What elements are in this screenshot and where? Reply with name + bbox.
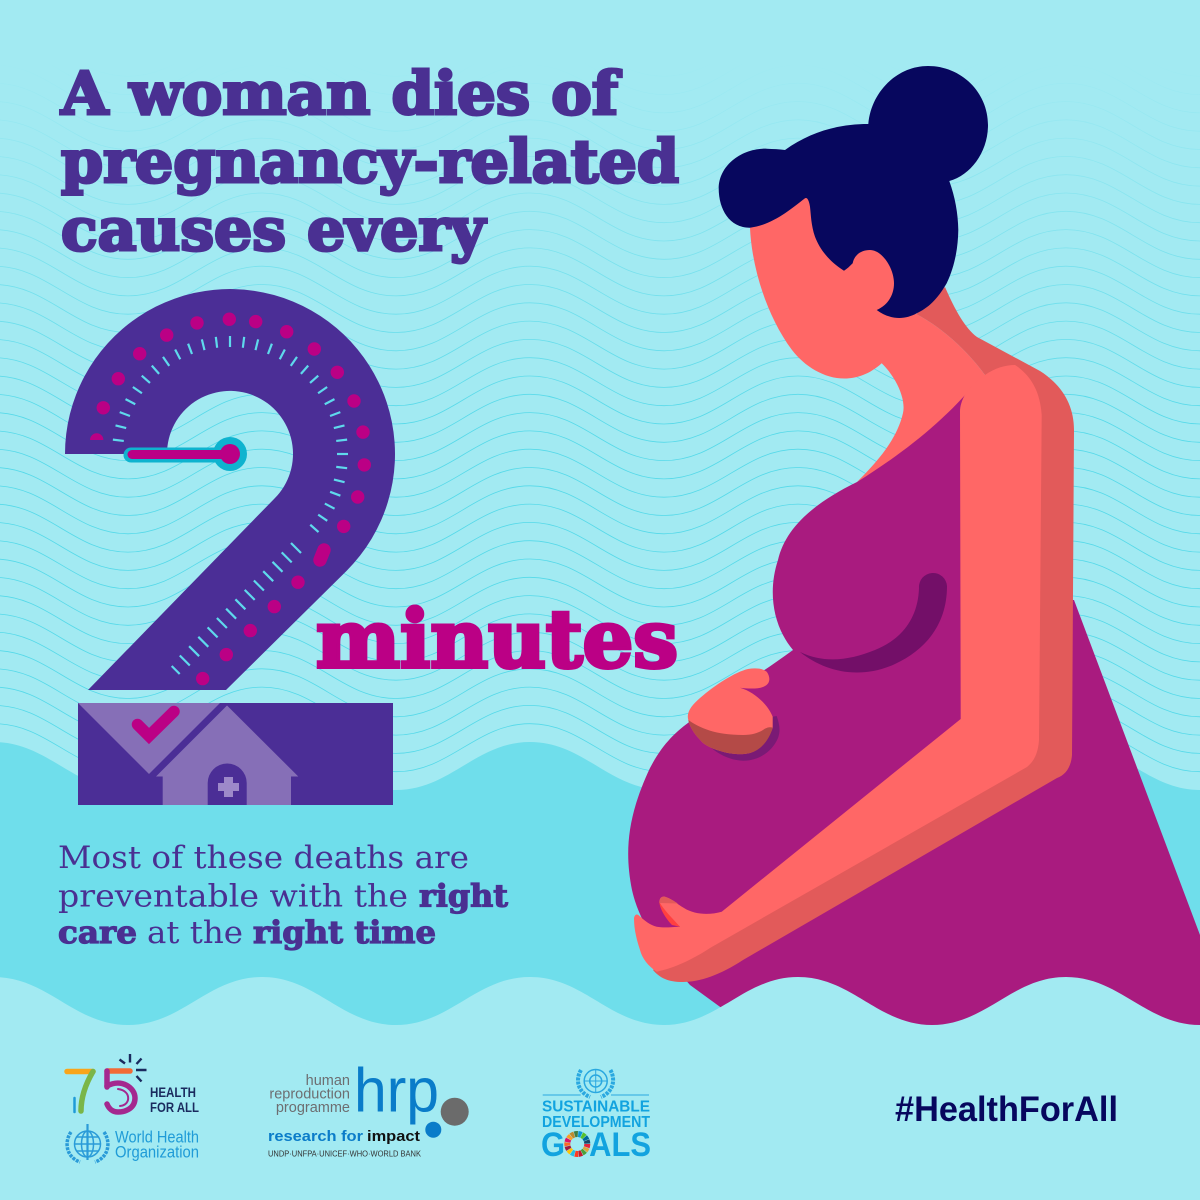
arm lit [634,365,1042,972]
subtext: preventable with the [58,878,408,914]
WHO emblem [67,1124,108,1162]
SDG text: SUSTAINABLE [542,1098,650,1116]
word: minutes: minutes [316,592,678,686]
upper hand [688,668,773,754]
thumb crease [659,902,680,927]
dress [628,382,1200,1060]
magenta minute dots [90,312,371,685]
SDG text: DEVELOPMENT [542,1114,650,1131]
programme name: programme [276,1100,350,1116]
subtext: Most of these deaths are [58,840,469,876]
gauge needle [131,437,247,471]
background wave lines [0,0,1200,772]
subtext: care [58,915,137,951]
SDG text: GOALS [541,1126,651,1164]
health for all text: FOR ALL [150,1100,199,1115]
icon: medical cross [218,777,239,797]
grey dot [441,1098,469,1126]
partner list: UNDP·UNFPA·UNICEF·WHO·WORLD BANK [268,1150,422,1158]
bottom wave band [0,977,1200,1200]
World Health Organization text: World Health [115,1128,199,1146]
hashtag: #HealthForAll [895,1090,1118,1129]
UN emblem [578,1070,613,1097]
sun rays [120,1054,146,1082]
clinic door [208,764,247,805]
logo: Sustainable Development Goals [541,1070,651,1164]
subtext: right [419,878,509,914]
health for all text: HEALTH [150,1085,196,1100]
title: A woman dies of [60,59,622,128]
subtext [58,840,509,951]
programme name [269,1073,350,1116]
icon: clinic house [156,706,298,805]
blue dot [425,1122,441,1138]
mid wave band [0,742,1200,1200]
breast shadow [800,573,947,673]
subtext: at the [147,915,243,951]
digit shape [65,289,395,690]
logo: HRP [268,1056,469,1158]
SDG text [541,1098,651,1164]
pregnant woman illustration [628,66,1200,1060]
hair [719,66,988,318]
numeral 75 [67,1071,135,1112]
upper hand shadow on dress [694,716,780,761]
research for impact [268,1128,420,1145]
programme name: human [306,1073,350,1089]
base panel [78,703,393,805]
envelope flap [78,703,220,774]
SDG colour wheel [563,1130,591,1158]
research for impact: impact [367,1128,420,1145]
programme name: reproduction [269,1086,350,1102]
title: pregnancy-related [61,127,679,196]
logo: WHO 75 Health for All [67,1054,199,1162]
subtext: right time [253,915,436,951]
thumb tip shade [659,897,678,904]
icon: check mark [138,712,174,736]
research for impact: research for [268,1128,363,1145]
World Health Organization text [115,1128,199,1162]
title: causes every [61,195,487,264]
upper hand shade [688,720,773,754]
numeral 2 gauge [65,289,395,690]
tick marks [113,336,348,674]
health for all text [150,1085,199,1115]
base: envelope and clinic [78,703,393,805]
World Health Organization text: Organization [115,1144,199,1162]
face and neck [750,190,990,482]
hrp wordmark: hrp [354,1056,439,1126]
neck, shoulder and arm shade [653,287,1074,982]
title [60,59,679,264]
rule lines [543,1094,649,1096]
